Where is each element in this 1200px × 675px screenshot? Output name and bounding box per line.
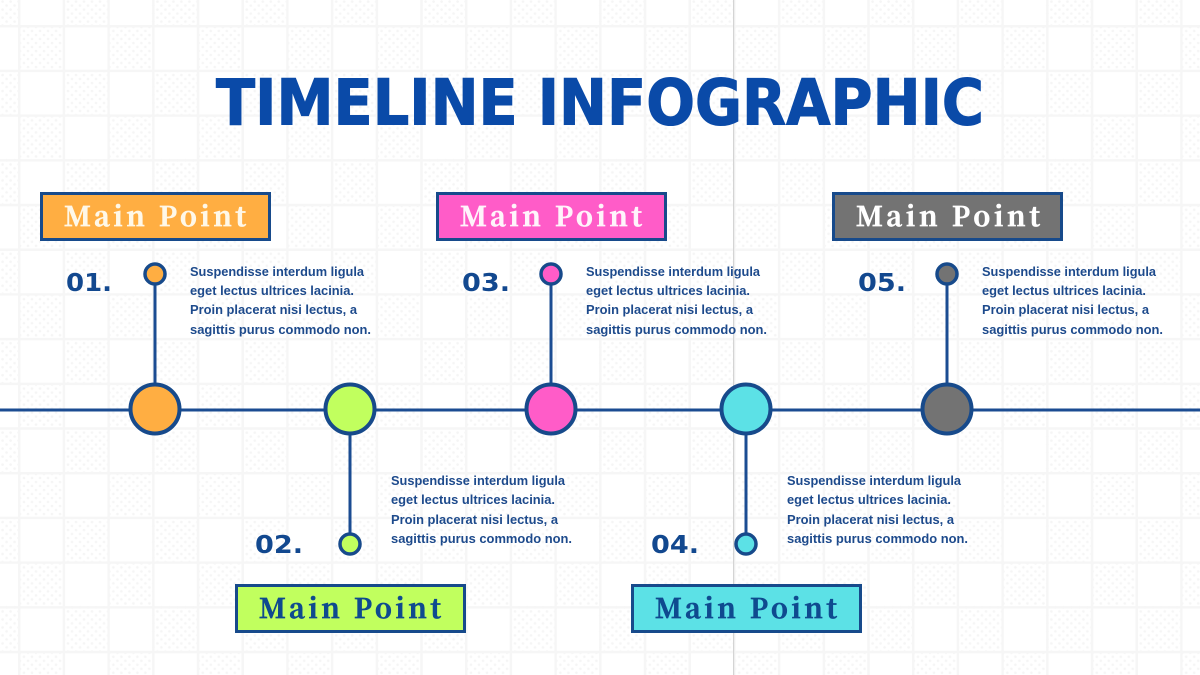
- small node 02: [340, 534, 360, 554]
- description 03: Suspendisse interdum ligula: [586, 264, 761, 279]
- description 03: Proin placerat nisi lectus, a: [586, 302, 754, 317]
- label box 01: Main Point: [64, 195, 246, 234]
- description 05: sagittis purus commodo non.: [982, 322, 1163, 337]
- description 05: eget lectus ultrices lacinia.: [982, 283, 1146, 298]
- description 04: Suspendisse interdum ligula: [787, 473, 962, 488]
- title: TIMELINE INFOGRAPHIC: [216, 66, 984, 140]
- label box 01: [42, 194, 270, 240]
- small node 01: [145, 264, 165, 284]
- step 04: [632, 384, 968, 632]
- number 05: 05.: [858, 268, 906, 297]
- description 04: sagittis purus commodo non.: [787, 531, 968, 546]
- small node 04: [736, 534, 756, 554]
- timeline node 03: [526, 384, 576, 434]
- description 01: sagittis purus commodo non.: [190, 322, 371, 337]
- label box 03: Main Point: [460, 195, 642, 234]
- description 02: Suspendisse interdum ligula: [391, 473, 566, 488]
- description 03: sagittis purus commodo non.: [586, 322, 767, 337]
- timeline axis: [0, 408, 1200, 412]
- connector 01: [154, 274, 156, 385]
- timeline node 02: [326, 384, 374, 434]
- description 01: Proin placerat nisi lectus, a: [190, 302, 358, 317]
- timeline node 05: [922, 384, 972, 434]
- connector 02: [348, 433, 352, 544]
- step 05: [834, 194, 1163, 434]
- description 01: Suspendisse interdum ligula: [190, 264, 365, 279]
- label box 04: [632, 586, 860, 632]
- step 01: [42, 194, 371, 434]
- description 04: Proin placerat nisi lectus, a: [787, 512, 955, 527]
- step 03: [438, 194, 767, 434]
- timeline node 04: [722, 384, 770, 434]
- description 05: Suspendisse interdum ligula: [982, 264, 1157, 279]
- description 04: eget lectus ultrices lacinia.: [787, 492, 951, 507]
- description 01: eget lectus ultrices lacinia.: [190, 283, 354, 298]
- description 03: eget lectus ultrices lacinia.: [586, 283, 750, 298]
- connector 03: [550, 274, 552, 385]
- label box 04: Main Point: [655, 587, 837, 626]
- number 04: 04.: [651, 530, 699, 559]
- connector 05: [946, 274, 948, 385]
- small node 05: [937, 264, 957, 284]
- connector 04: [744, 433, 748, 544]
- label box 03: [438, 194, 666, 240]
- number 02: 02.: [255, 530, 303, 559]
- label box 02: [236, 586, 464, 632]
- number 01: 01.: [66, 268, 112, 297]
- small node 03: [541, 264, 561, 284]
- description 02: eget lectus ultrices lacinia.: [391, 492, 555, 507]
- label box 02: Main Point: [259, 587, 441, 626]
- description 02: sagittis purus commodo non.: [391, 531, 572, 546]
- description 02: Proin placerat nisi lectus, a: [391, 512, 559, 527]
- label box 05: Main Point: [856, 195, 1040, 234]
- step 02: [236, 384, 572, 632]
- number 03: 03.: [462, 268, 510, 297]
- label box 05: [834, 194, 1062, 240]
- description 05: Proin placerat nisi lectus, a: [982, 302, 1150, 317]
- timeline node 01: [130, 384, 180, 434]
